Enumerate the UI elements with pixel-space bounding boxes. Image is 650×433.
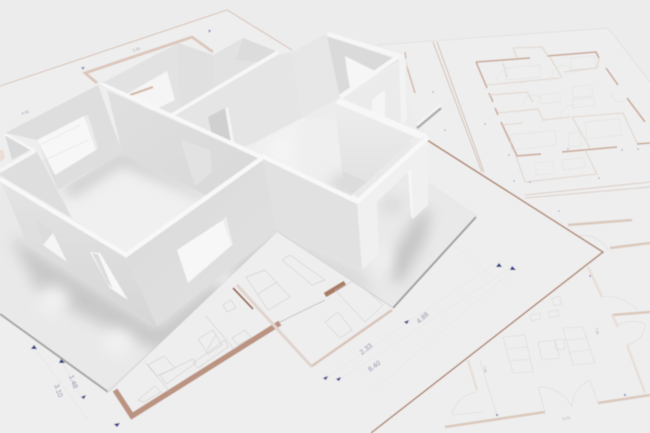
right outer wall with door opening [357, 137, 428, 270]
dimension lines and labels [31, 260, 516, 427]
front right room wall [335, 98, 428, 194]
left window [37, 116, 96, 175]
interior door [372, 90, 385, 122]
right room floor [268, 130, 348, 192]
fin partition [180, 139, 212, 186]
front right outer wall [126, 158, 277, 326]
left room interior walls [5, 85, 262, 203]
upper right window [345, 56, 375, 88]
centre outer wall [262, 158, 362, 270]
left partition fin [0, 134, 72, 218]
dimension lines and labels: 4.88 [416, 311, 431, 325]
front left outer wall [0, 179, 157, 326]
dimension lines and labels: 3.10 [52, 383, 63, 399]
upper right wall block [292, 33, 407, 130]
plan dimension markers [432, 91, 639, 212]
soft shadows on plate [10, 196, 432, 354]
model base plate [0, 105, 477, 393]
small side window [37, 220, 67, 262]
front wall top strips [0, 137, 428, 255]
back-left plan sheet: 4.41 [21, 108, 30, 116]
back-left plan sheet [0, 10, 292, 200]
back-left room walls [98, 38, 278, 114]
lower-right floor plan drawing: 7.46 [594, 327, 600, 335]
lower-right floor plan drawing: 11.55 [562, 416, 571, 421]
foreground plan sheet [0, 140, 603, 433]
foreground floor plan walls [115, 232, 510, 416]
dimension lines and labels: 1.48 [67, 374, 78, 390]
left room floor [66, 152, 204, 196]
ridge wall top strip [98, 83, 358, 204]
dimension lines and labels: 8.40 [367, 360, 382, 374]
front left window [90, 252, 128, 300]
back-left plan sheet: 3.30 [132, 45, 141, 53]
upper floor plan drawing [476, 47, 650, 182]
back window [127, 71, 175, 112]
front right window [177, 216, 233, 283]
right plan sheet [371, 28, 650, 433]
dimension lines and labels: 2.33 [359, 343, 374, 357]
middle wall with door [172, 52, 302, 150]
lower-right floor plan drawing: 7.46 [482, 365, 488, 373]
lower-right floor plan drawing [445, 220, 650, 427]
